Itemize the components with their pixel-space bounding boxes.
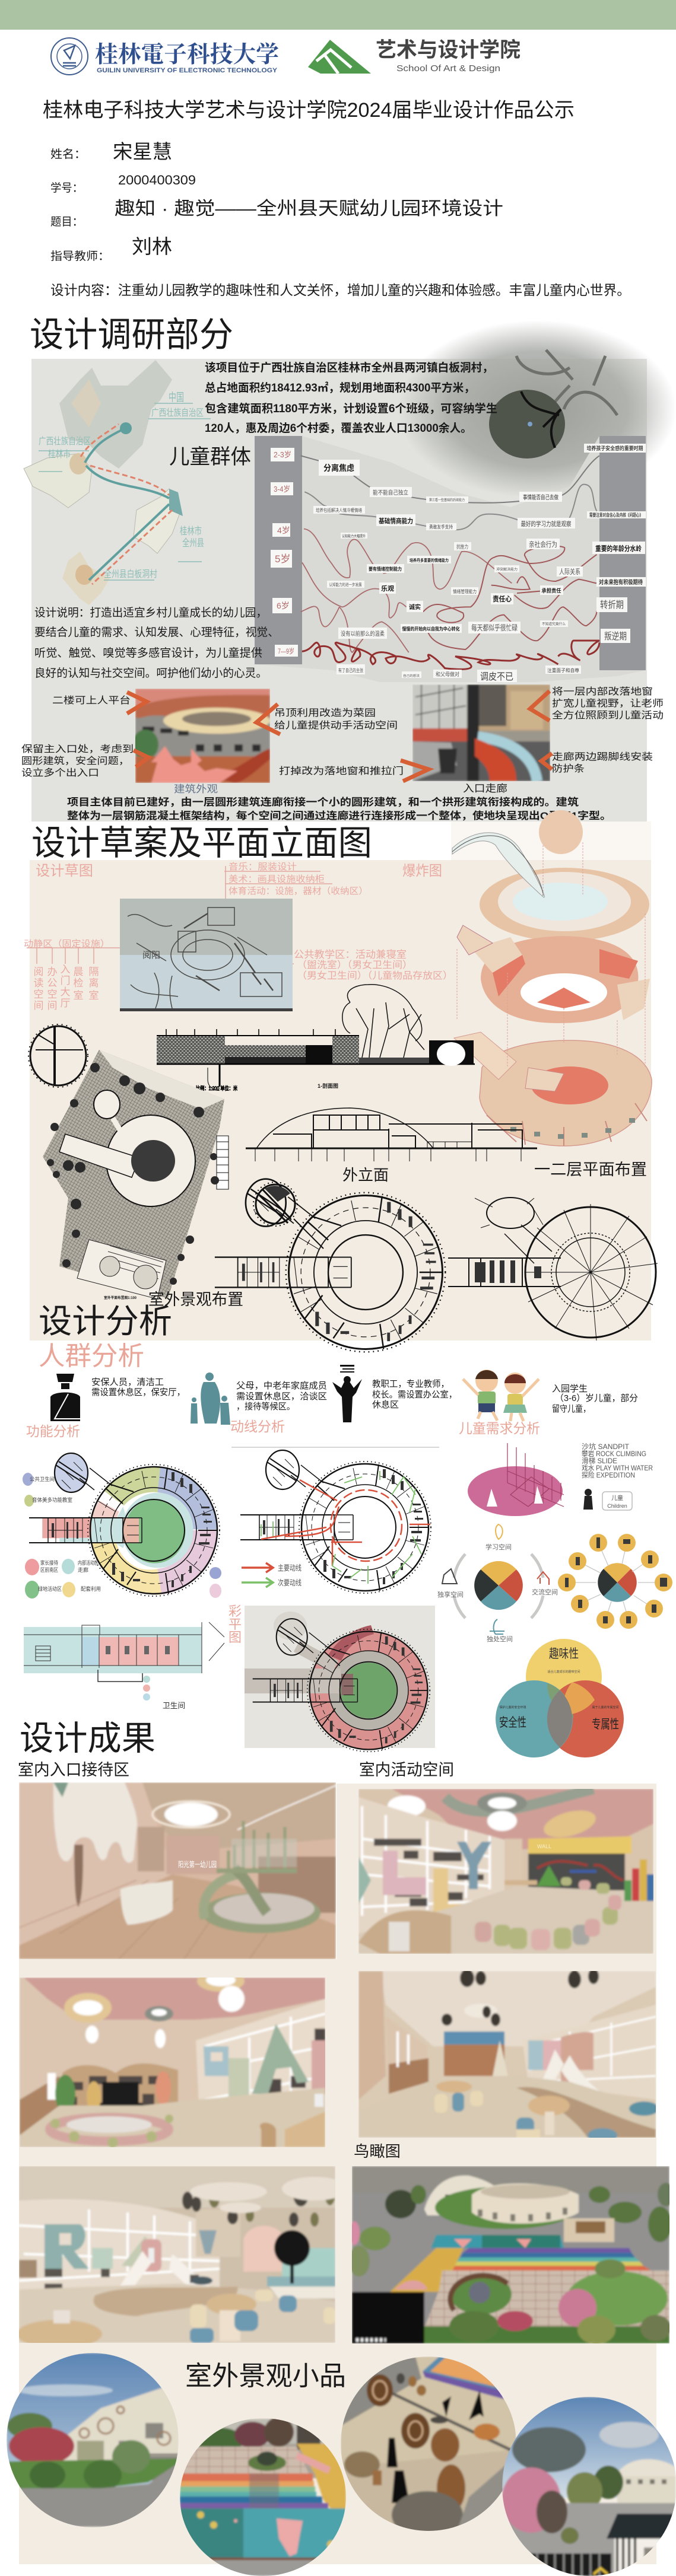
stage labels: 慢慢的开始向以自我为中心转化 [402,626,459,632]
photo: entrance corridor [412,684,550,781]
stage labels: 抗挫力 [456,543,468,550]
sketch labels: 室 [74,990,83,1001]
stage labels: 情绪管理能力 [453,588,477,594]
swoosh roof [452,833,544,897]
vignette: sand play [341,2357,516,2539]
map labels: 广西壮族自治区 [151,407,204,418]
stage labels: 第三看一些基础的后续能力 [429,498,465,502]
heading: function analysis: 功能分析 [26,1424,80,1439]
photo annotations: 给儿童提供动手活动空间 [274,719,398,731]
floor plan 1 [215,1179,445,1352]
sketch labels: 音乐：服装设计 [228,862,297,872]
text: parents: ，接待等候区。 [236,1401,295,1412]
stage labels: 有了自己的主张 [338,667,363,673]
floor plan 2 [448,1198,658,1340]
photo annotations [21,686,664,795]
age labels: 6岁 [277,601,290,610]
logo: School of Art and Design: 艺术与设计学院 [376,39,521,62]
circulation legend: 次要动线 [278,1578,301,1587]
stage labels: 没有以前那么的温柔 [341,630,385,638]
zone legend: 走廊 [78,1566,88,1573]
stage labels: 冲突解决能力 [496,567,518,572]
diagram: venn of qualities: 适合儿童成长的趣味空间 [547,1670,580,1674]
icon: green triangles [308,40,371,74]
small plan fragment and scale [28,1024,237,1091]
stage labels: 事情能否自己去做 [523,493,558,501]
parking and lawns [217,1136,228,1189]
design note: 设计说明：打造出适宜乡村儿童成长的幼儿园， [34,606,267,619]
label: landscape layout: 室外景观布置 [148,1291,243,1308]
icon: university seal [51,38,88,75]
text: needs list: 戏水 PLAY WITH WATER [582,1464,653,1472]
icon: cartoon children [463,1370,539,1421]
projection guides [457,842,645,1068]
label: landscape layout [104,1291,243,1308]
map labels: 中国 [169,391,184,404]
middle plan layer [481,936,638,1023]
vignette: gate view [502,2397,676,2576]
header band [0,0,676,30]
student information: 学号： [50,182,83,195]
sketch labels: 入 [61,964,70,975]
heading: sketches and plans: 设计草案及平面立面图 [31,824,372,862]
stage labels: 培养包括解决人情冷暖情绪 [316,507,362,513]
heading: child needs analysis: 儿童需求分析 [459,1421,540,1436]
caption: aerial view: 鸟瞰图 [354,2142,401,2160]
text: needs list [582,1442,653,1479]
zone legend [23,1473,221,1599]
photo annotations: 设立多个出入口 [21,768,99,778]
plan: restroom detail [24,1622,224,1710]
render: reception [19,1782,336,1959]
stage labels: 调皮不已 [480,671,513,682]
stage labels: 叛逆期 [604,631,627,642]
sketch labels: 空 [33,989,44,1000]
building summary: 整体为一层钢筋混凝土框架结构，每个空间之间通过连廊进行连接形成一个整体，使地块呈现出O型和1字型。 [67,810,611,821]
sketch labels [24,862,453,1011]
student information: 指导教师： [50,250,110,263]
photo annotations: 扩宽儿童视野，让老师 [552,698,664,709]
vignette: rainbow paving [180,2417,346,2576]
text: security staff: 需设置休息区，保安厅， [91,1387,185,1397]
small plan fragment and scale: 比例：1:200 单位：米 [196,1085,237,1091]
vertical label: colour plan [228,1604,242,1645]
panel: results [19,1784,656,2564]
space labels: 独处空间 [487,1635,513,1643]
zone legend: 配套利用 [81,1585,101,1592]
text: parents: 父母，中老年家庭成员 [236,1381,327,1391]
student information: 题目： [50,216,83,228]
heading: outdoor features: 室外景观小品 [185,2361,346,2391]
project description: 该项目位于广西壮族自治区桂林市全州县两河镇白板洞村， [205,361,493,374]
stage labels: 要有情绪控制能力 [369,566,402,572]
photo annotations: 将一层内部改落地窗 [552,686,653,697]
photo: pencil sketch: 阅阳 [142,950,160,960]
zone legend: 公共卫生间 [30,1476,55,1482]
map labels [39,391,211,580]
stage labels: 不知道究竟什么 [542,622,566,626]
render: slide area [358,1969,659,2142]
map: location from China to site [24,360,211,605]
stage labels: 每天都似乎很忙碌 [471,623,518,632]
space labels [437,1524,558,1643]
zone legend: 音体美多功能教室 [32,1496,72,1503]
text: students: 留守儿童， [552,1403,591,1414]
development curves [301,456,599,669]
panel: research [31,359,647,821]
stage labels: 重要的年龄分水岭 [595,544,642,553]
photo annotations: 走廊两边踢脚线安装 [552,752,653,762]
heading: research: 设计调研部分 [30,316,233,354]
stage labels [313,444,646,682]
photo annotations: 吊顶利用改造为菜园 [274,708,376,718]
landscape plan [43,1050,228,1299]
sketch labels: 检 [74,977,83,989]
photo: pencil sketch [120,899,293,1011]
render: aerial view [348,2166,674,2344]
student information: 姓名： [50,148,86,161]
zone legend: 家长接待 [40,1559,58,1566]
sketch labels: 设计草图 [36,863,93,879]
logo: Guilin University of Electronic Technology [51,36,279,75]
diagram: venn of qualities [496,1639,624,1757]
sketch labels: （盥洗室）（男女卫生间） [297,959,412,970]
sketch labels: 门 [61,975,70,986]
circulation legend [242,1563,301,1587]
stage labels: 对未来抱有积极期待 [599,578,643,586]
icon: child legend [583,1489,632,1510]
sketch labels: 大 [61,986,70,998]
photo annotations: 全方位照顾到儿童活动 [552,709,664,721]
icon: security guard [50,1374,80,1421]
map: China [59,360,172,469]
label: elevation: 外立面 [342,1166,389,1184]
sketch labels: 读 [33,977,44,989]
restroom legend [143,1676,150,1683]
sketch labels: 美术：画具设施收纳柜 [228,874,325,884]
text: teachers [372,1379,457,1410]
plan: circulation [231,1447,439,1593]
stage column right [599,436,646,670]
sketch labels: 爆炸图 [402,863,442,879]
render: activity space wall: WALL [537,1843,551,1849]
vertical label: colour plan: 图 [228,1630,242,1645]
sketch labels: 晨 [74,966,83,977]
photo annotations: 二楼可上人平台 [52,695,131,706]
sketch labels: 体育活动：设施，器材（收纳区） [228,886,368,896]
photo annotations: 保留主入口处，考虑到 [21,744,134,754]
text: needs list: 沙坑 SANDPIT [582,1442,630,1451]
map: Quanzhou [62,552,110,605]
logo: School of Art and Design: School Of Art & Design [396,63,500,74]
text: students: 入园学生 [552,1384,588,1394]
student information: 2000400309 [118,173,196,187]
text: teachers: 休息区 [372,1400,399,1410]
icon: parents with children [191,1373,230,1425]
photo annotations: 入口走廊 [463,783,507,794]
render: READY area [17,2166,347,2348]
render: activity space wall [358,1789,654,1954]
chart: child needs illustration [468,1443,564,1516]
stage labels: 人际关系 [559,568,580,576]
map: Guangxi [24,454,92,508]
age labels: 2-3岁 [274,450,291,459]
heading: user analysis: 人群分析 [39,1342,144,1371]
sketch labels: 阅 [33,966,44,977]
text: needs list: 攀岩 ROCK CLIMBING [582,1449,646,1458]
logo: Guilin University of Electronic Technology: GUILIN UNIVERSITY OF ELECTRONIC TECHNOLOGY [97,67,278,74]
route lines [85,430,169,580]
stage labels: 最好的学习力就是观察 [521,520,571,528]
stage labels: 分离焦虑 [323,463,354,473]
design note: 听觉、触觉、嗅觉等多感官设计，为儿童提供 [34,647,262,660]
stage labels: 承担责任 [541,587,561,594]
zone legend: 区前南区 [40,1566,58,1573]
label: landscape layout: 室外平面布置图1:100 [104,1295,137,1300]
logo: Guilin University of Electronic Technology: 桂林電子科技大学 [95,36,279,69]
vignette: planting bed [7,2353,179,2527]
text: students: （3-6）岁儿童，部分 [555,1393,638,1403]
space labels: 独享空间 [437,1590,464,1599]
diagram: activity wheel [558,1534,672,1629]
building footprint [106,1115,195,1206]
text: needs list: 滑梯 SLIDE [582,1457,617,1465]
project description [205,361,497,435]
sketch labels: 空 [47,989,57,1000]
plan: restroom detail: 卫生间 [163,1701,185,1710]
sketch labels: 间 [33,1000,44,1011]
photo annotations: 圆形建筑，安全问题， [21,756,129,766]
vertical label: colour plan: 彩 [228,1604,242,1619]
stage labels: 认知能力大幅提升 [342,534,366,539]
diagram: venn of qualities: 安全性 [499,1716,526,1730]
stage labels: 诚实 [409,603,421,611]
icon: child legend: 儿童 [611,1494,623,1502]
student information: 刘林 [132,235,172,257]
text: teachers: 教职工，专业教师， [372,1379,449,1389]
stage labels: 责任心 [493,594,512,603]
text: security staff: 安保人员，清洁工 [91,1377,164,1387]
student information [50,141,503,263]
space labels: 交流空间 [532,1588,558,1596]
site circle [489,390,565,458]
diagram: venn of qualities: 属于儿童的专属空间 [592,1705,619,1709]
text: security staff [91,1377,185,1397]
secondary routes [261,1471,421,1584]
callout chevrons [127,691,552,781]
icon: teacher in gown [332,1365,362,1422]
sketch labels: 公 [47,977,57,989]
diagram: venn of qualities: 保护儿童的安全环境 [499,1705,526,1709]
photo: building exterior [132,689,270,783]
section elevation [246,1108,537,1161]
age labels [271,448,298,657]
plan: colour plan [245,1606,435,1752]
age labels: 4岁 [277,526,290,535]
diagram: venn of qualities: 专属性 [592,1718,619,1731]
sketch labels: 公共教学区：活动兼寝室 [294,948,407,960]
age labels: 3-4岁 [274,485,290,493]
zone legend: 绿地活动区 [38,1585,62,1592]
stage labels: 和父母做对 [436,671,459,677]
stage labels: 认知能力的进一步发展 [329,582,362,587]
age labels: 5岁 [275,553,290,565]
map labels: 全州县 [182,537,204,549]
sketch labels: 厅 [61,998,70,1009]
stage labels: 转折期 [600,600,624,610]
plan: function zones [23,1453,221,1599]
text: teachers: 校长。需设置办公室， [372,1390,457,1400]
logo: School of Art and Design [308,39,521,74]
title: 桂林电子科技大学艺术与设计学院2024届毕业设计作品公示 [43,99,575,122]
diagram: venn of qualities: 趣味性 [549,1647,579,1661]
photo annotations: 打掉改为落地窗和推拉门 [279,766,404,776]
project description: 包含建筑面积1180平方米，计划设置6个班级，可容纳学生 [205,402,497,415]
sketch labels: 间 [47,1000,57,1011]
render: reception: 阳光第一幼儿园 [178,1860,217,1869]
space labels: 学习空间 [485,1543,512,1551]
label: floor plans: 一二层平面布置 [534,1161,647,1179]
main routes [261,1480,430,1566]
stage labels: 注重面子和自尊 [547,667,579,673]
trees [47,1063,219,1285]
heading: analysis: 设计分析 [39,1303,172,1340]
design note: 要结合儿童的需求、认知发展、心理特征，视觉、 [34,626,279,639]
render: reading space [20,1970,326,2148]
caption: activity space: 室内活动空间 [359,1761,454,1779]
text: parents: 需设置休息区，洽谈区 [236,1392,327,1402]
stage labels: 乐观 [381,585,394,593]
aerial site photo [398,320,676,498]
stage labels: 基础情商能力 [379,517,413,525]
exploded diagram [452,810,652,1146]
stage labels: 培养孩子安全感的重要时期 [586,445,643,451]
sketch labels: 离 [89,977,99,989]
student information: 趣知 · 趣觉——全州县天赋幼儿园环境设计 [115,198,503,219]
sketch labels: 室 [89,990,99,1001]
building summary: 项目主体目前已建好，由一层圆形建筑连廊衔接一个小的圆形建筑，和一个拱形建筑衔接构成的。建筑 [67,796,579,808]
student information: 宋星慧 [113,141,172,163]
stage labels: 需要注意对自信心及内核《问题心》 [589,512,643,518]
icon: child legend: Children [607,1503,627,1509]
text: students [552,1384,638,1414]
stage labels: 培养丹多重要的情绪能力 [410,558,449,563]
photo annotations: 建筑外观 [174,784,218,795]
text: needs list: 探险 EXPEDITION [582,1470,635,1479]
caption: entrance reception: 室内入口接待区 [18,1761,129,1779]
map: Guilin [134,489,181,553]
vertical label: colour plan: 平 [228,1617,242,1632]
panel: sketches and plans [30,821,651,1340]
sketch labels: 办 [47,966,57,977]
photo annotations: 防护条 [552,763,585,774]
sketch labels: 动静区（固定设施） [24,939,110,949]
zone plan lines [29,1453,220,1596]
project description: 总占地面积约18412.93㎡，规划用地面积4300平方米， [205,381,475,394]
diagram: space wheel [437,1524,558,1643]
tree [342,985,424,1058]
map labels: 桂林市 [48,449,71,460]
stage labels: 自己的想法 [403,674,420,678]
heading: circulation analysis: 动线分析 [230,1419,285,1434]
roof disc [539,810,583,854]
stage labels: 亲社会行为 [529,540,557,549]
small circular pavilion [253,1182,323,1249]
heading: results: 设计成果 [20,1720,155,1757]
age labels: 7—9岁 [278,647,294,655]
label: section drawing: 1-剖面图 [318,1082,338,1089]
stage labels: 勇敢友手支持 [429,524,453,530]
zone legend: 内部活动区 [78,1559,99,1566]
map labels: 桂林市 [180,526,202,537]
building summary [67,796,611,821]
text: parents [236,1381,327,1412]
circulation legend: 主要动线 [278,1564,301,1572]
sketch labels: 隔 [89,966,99,977]
stage labels: 能不能自己独立 [373,489,408,496]
design note: 良好的认知与社交空间。呵护他们幼小的心灵。 [34,667,267,680]
map labels: 广西壮族自治区 [39,436,91,447]
chart: child development timeline [255,436,646,682]
zone colours [42,1454,217,1595]
map labels: 全州县白板洞村 [104,569,157,579]
age column left [255,436,302,664]
ground floor layer [480,1040,652,1146]
design content statement: 设计内容：注重幼儿园教学的趣味性和人文关怀，增加儿童的兴趣和体验感。丰富儿童内心世界。 [50,282,630,298]
elevation drawing [157,985,475,1090]
design note [34,606,279,680]
heading: children group: 儿童群体 [169,445,251,469]
project description: 120人，惠及周边6个村委，覆盖农业人口13000余人。 [205,421,472,435]
sketch labels: （男女卫生间）（儿童物品存放区） [297,970,453,981]
